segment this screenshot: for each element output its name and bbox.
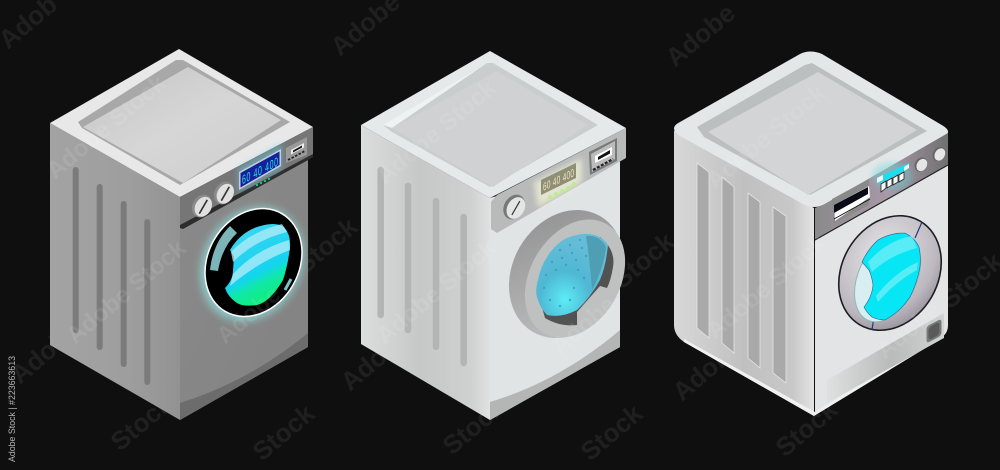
glass perforation dots (543, 239, 587, 307)
panel glow (534, 158, 582, 208)
door glass (536, 234, 608, 316)
button row (881, 172, 904, 192)
front face (180, 160, 308, 420)
door glow (180, 188, 324, 340)
door seams (872, 222, 922, 330)
knob (499, 191, 530, 224)
background watermarks: Stock (437, 392, 511, 461)
panel edge (815, 165, 948, 240)
lid inner (83, 67, 281, 183)
lid (383, 63, 598, 187)
glass inner shade (586, 236, 606, 290)
door outer ring (486, 189, 647, 359)
detergent drawer (832, 179, 870, 223)
watermarks over machines: Adobe Stock (42, 69, 172, 185)
washing machine 2: white with ring door (361, 51, 647, 420)
background watermarks: Adobe (667, 332, 748, 407)
watermarks over machines: Adobe (872, 296, 946, 365)
watermarks over machines: Adobe Stock (372, 234, 502, 350)
knob left (912, 155, 930, 174)
lid (78, 60, 290, 185)
door small accent (285, 279, 291, 290)
glass reflections (868, 236, 918, 302)
side vents (697, 163, 786, 383)
display (239, 149, 281, 190)
watermarks over machines: Adobe (212, 281, 286, 350)
lid (697, 63, 927, 195)
washing machine 1: dark grey (50, 49, 324, 420)
front face (815, 165, 948, 413)
background watermarks: Stock (607, 226, 681, 295)
door arc accent (210, 226, 237, 271)
door glass (225, 224, 290, 306)
cyan display (879, 163, 909, 184)
side vents (381, 170, 464, 363)
top face (50, 49, 313, 197)
left side face (361, 125, 490, 420)
background watermarks: Stock (105, 388, 179, 457)
watermarks over machines: Adobe Stock (372, 74, 502, 190)
bottom panel strip (827, 313, 944, 403)
watermarks over machines: Adobe (547, 291, 621, 360)
knob left (188, 191, 216, 221)
knob right (930, 145, 948, 163)
front face (490, 160, 620, 420)
small control module (589, 138, 617, 175)
square button (926, 319, 942, 343)
glass reflections (230, 224, 290, 286)
base strip (490, 330, 620, 420)
bottom edge (684, 335, 942, 416)
display end cap right (904, 164, 909, 171)
door glass (862, 233, 920, 320)
door glass lens (841, 223, 934, 332)
display end cap left (877, 175, 883, 183)
left side face (50, 123, 180, 420)
top face (361, 51, 626, 198)
background watermarks: Adobe (335, 322, 416, 397)
display glow (238, 143, 282, 192)
display digits: 60 40 400 (543, 167, 574, 193)
knob right (210, 178, 238, 208)
background watermarks: Stock (290, 211, 364, 280)
door front ring (505, 201, 645, 356)
watermarks over machines: Adobe Stock (702, 229, 832, 345)
LED dots (548, 182, 576, 199)
background watermarks: Stock (575, 398, 649, 467)
watermarks over machines: Adobe Stock (702, 79, 832, 195)
lid highlight (383, 63, 487, 128)
top face (674, 52, 948, 207)
door ring (186, 191, 321, 334)
door opening dark (540, 237, 613, 325)
side credit text: Adobe Stock | #223663613 (7, 356, 17, 462)
control panel (815, 133, 948, 240)
display (541, 163, 576, 195)
small control module (286, 137, 307, 163)
lid inner (392, 71, 588, 187)
background watermarks: Stock (770, 394, 844, 463)
watermarks over machines: Adobe Stock (62, 234, 192, 350)
control panel (180, 127, 313, 228)
background watermarks: Stock (247, 398, 321, 467)
base strip (180, 333, 308, 420)
left side face (674, 130, 814, 416)
background watermarks: Adobe (5, 315, 86, 390)
side vents (76, 170, 147, 382)
panel glow (872, 162, 912, 190)
control panel (491, 128, 626, 233)
watermarks over machines (42, 69, 946, 365)
lid inner (708, 72, 917, 195)
panel underside shadow (180, 154, 313, 229)
washing machine 3: white rounded (674, 52, 962, 416)
display digits: 60 40 400 (242, 155, 278, 188)
door ring (818, 197, 962, 349)
display LEDs (256, 178, 270, 186)
